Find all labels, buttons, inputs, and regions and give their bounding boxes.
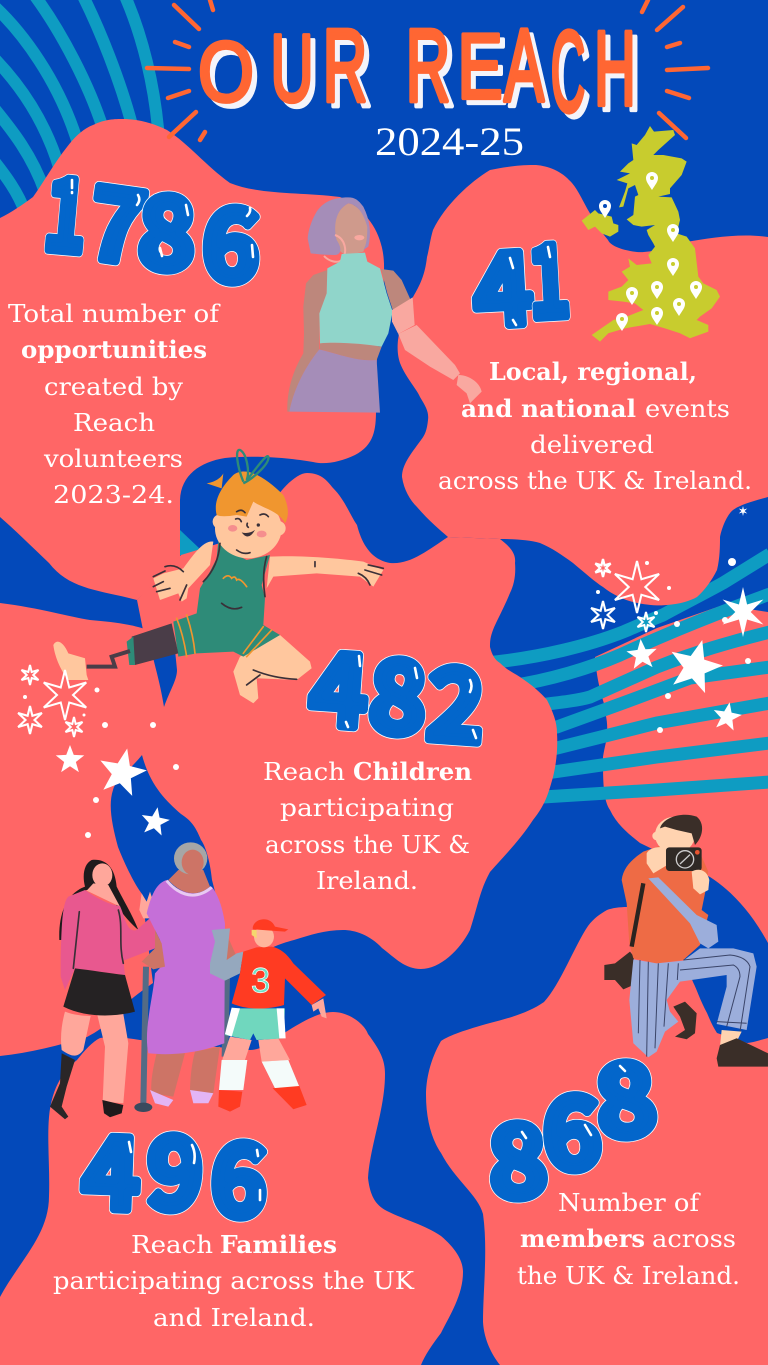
text: children: across the UK & — [265, 831, 470, 859]
number: 41: 4 — [469, 208, 536, 355]
text: children: Reach — [263, 758, 345, 786]
text: events: events — [645, 395, 730, 423]
teal triangle accent — [180, 530, 199, 555]
number: 1786: 7 — [80, 143, 156, 294]
stars and dots lower-left — [18, 665, 179, 838]
text: opportunities: volunteers — [43, 445, 183, 473]
boy in red football shirt: 3 — [251, 961, 270, 1000]
title: R — [323, 9, 367, 124]
figure: jumping child with prosthetic leg — [53, 450, 383, 703]
text: children: participating — [280, 794, 454, 822]
text: children: Children — [353, 757, 472, 786]
cane — [134, 967, 152, 1112]
text: events: delivered — [530, 431, 654, 459]
number: 482: 8 — [365, 615, 432, 764]
number: 496: 4 — [80, 1092, 143, 1239]
number: 868: 8 — [589, 1018, 662, 1168]
number: 482: 4 — [306, 608, 373, 757]
number: 41: 1 — [524, 200, 573, 347]
panel: blob for 41 events — [398, 165, 768, 605]
panel: blob for 482 children — [0, 473, 557, 1056]
woman in pink sweater — [50, 860, 159, 1119]
panel: right coral blob behind stripes — [595, 605, 768, 943]
title: A — [509, 13, 550, 128]
number: 41: 4 — [469, 208, 536, 355]
panel: blob for 868 members — [426, 907, 768, 1365]
title: H — [599, 16, 641, 134]
text: members — [517, 1189, 740, 1290]
title: E — [462, 21, 508, 123]
number: 1786: 7 — [80, 143, 156, 294]
title: O — [198, 24, 254, 119]
number: 1786: 1 — [39, 135, 94, 282]
number: 868 — [484, 1018, 662, 1227]
text: opportunities: opportunities — [21, 335, 207, 364]
text: opportunities: Reach — [73, 409, 155, 437]
title: U — [270, 15, 314, 121]
number: 482: 4 — [306, 608, 373, 757]
number: 496: 9 — [144, 1093, 206, 1240]
number: 482: 2 — [423, 623, 490, 772]
title: R — [406, 9, 450, 124]
title — [198, 8, 641, 141]
text: members: Number of — [558, 1189, 701, 1217]
title: R — [411, 14, 455, 129]
title: C — [556, 13, 590, 141]
title: E — [457, 16, 503, 118]
figure: woman with purple hair — [287, 197, 482, 413]
subtitle year: 2024-25 — [375, 119, 524, 164]
decorative concentric arcs top-left — [0, 0, 159, 212]
title: U — [275, 20, 319, 126]
title: C — [551, 8, 585, 136]
number: 1786: 8 — [135, 151, 200, 300]
figure: family group — [50, 842, 327, 1119]
title: A — [504, 8, 545, 123]
text: opportunities: Total number of — [8, 300, 221, 328]
title sunburst rays — [147, 0, 708, 140]
number: 868: 8 — [589, 1018, 662, 1168]
number: 1786: 6 — [200, 164, 263, 311]
text: opportunities: 2023-24. — [53, 481, 174, 509]
number: 868: 8 — [484, 1080, 551, 1227]
number: 1786: 6 — [200, 164, 263, 311]
number: 496: 4 — [80, 1092, 143, 1239]
title: O — [203, 29, 259, 124]
teal wave stripes — [485, 554, 768, 798]
text: members: members — [520, 1224, 645, 1253]
text: families: participating across the UK — [53, 1267, 415, 1295]
panel: blob for 1786 opportunities — [0, 119, 384, 600]
text: children — [263, 757, 472, 895]
stars and dots right — [591, 506, 763, 733]
number: 868: 6 — [538, 1052, 605, 1199]
number: 41 — [469, 200, 573, 355]
number: 496: 6 — [208, 1100, 270, 1247]
number: 1786: 1 — [39, 135, 94, 282]
number: 496: 9 — [144, 1093, 206, 1240]
text: families: Reach — [131, 1231, 213, 1259]
boy in red football shirt — [210, 919, 327, 1112]
text: families — [53, 1230, 415, 1332]
figure: photographer kneeling — [604, 815, 768, 1067]
grandmother in purple dress — [142, 842, 237, 1107]
text: events: and national — [461, 394, 636, 423]
number: 482 — [306, 608, 490, 772]
number: 482: 2 — [423, 623, 490, 772]
title: R — [328, 14, 372, 129]
text: families: and Ireland. — [153, 1304, 315, 1332]
text: members: across — [652, 1225, 736, 1253]
number: 1786: 8 — [135, 151, 200, 300]
text: opportunities — [8, 300, 221, 509]
text: children: Ireland. — [316, 867, 418, 895]
text: events — [438, 357, 752, 495]
title: H — [594, 11, 636, 129]
text: opportunities: created by — [44, 373, 183, 401]
text: events: across the UK & Ireland. — [438, 467, 752, 495]
number: 868: 6 — [538, 1052, 605, 1199]
text: families: Families — [220, 1230, 337, 1259]
UK and Ireland map with pins — [582, 126, 720, 342]
number: 496: 6 — [208, 1100, 270, 1247]
number: 482: 8 — [365, 615, 432, 764]
second cane behind boy — [225, 977, 227, 1057]
number: 496 — [80, 1092, 270, 1247]
text: members: the UK & Ireland. — [517, 1262, 740, 1290]
panel: blob for 496 families — [0, 1012, 463, 1365]
text: events: Local, regional, — [489, 357, 697, 386]
number: 1786 — [39, 135, 263, 311]
number: 41: 1 — [524, 200, 573, 347]
number: 868: 8 — [484, 1080, 551, 1227]
